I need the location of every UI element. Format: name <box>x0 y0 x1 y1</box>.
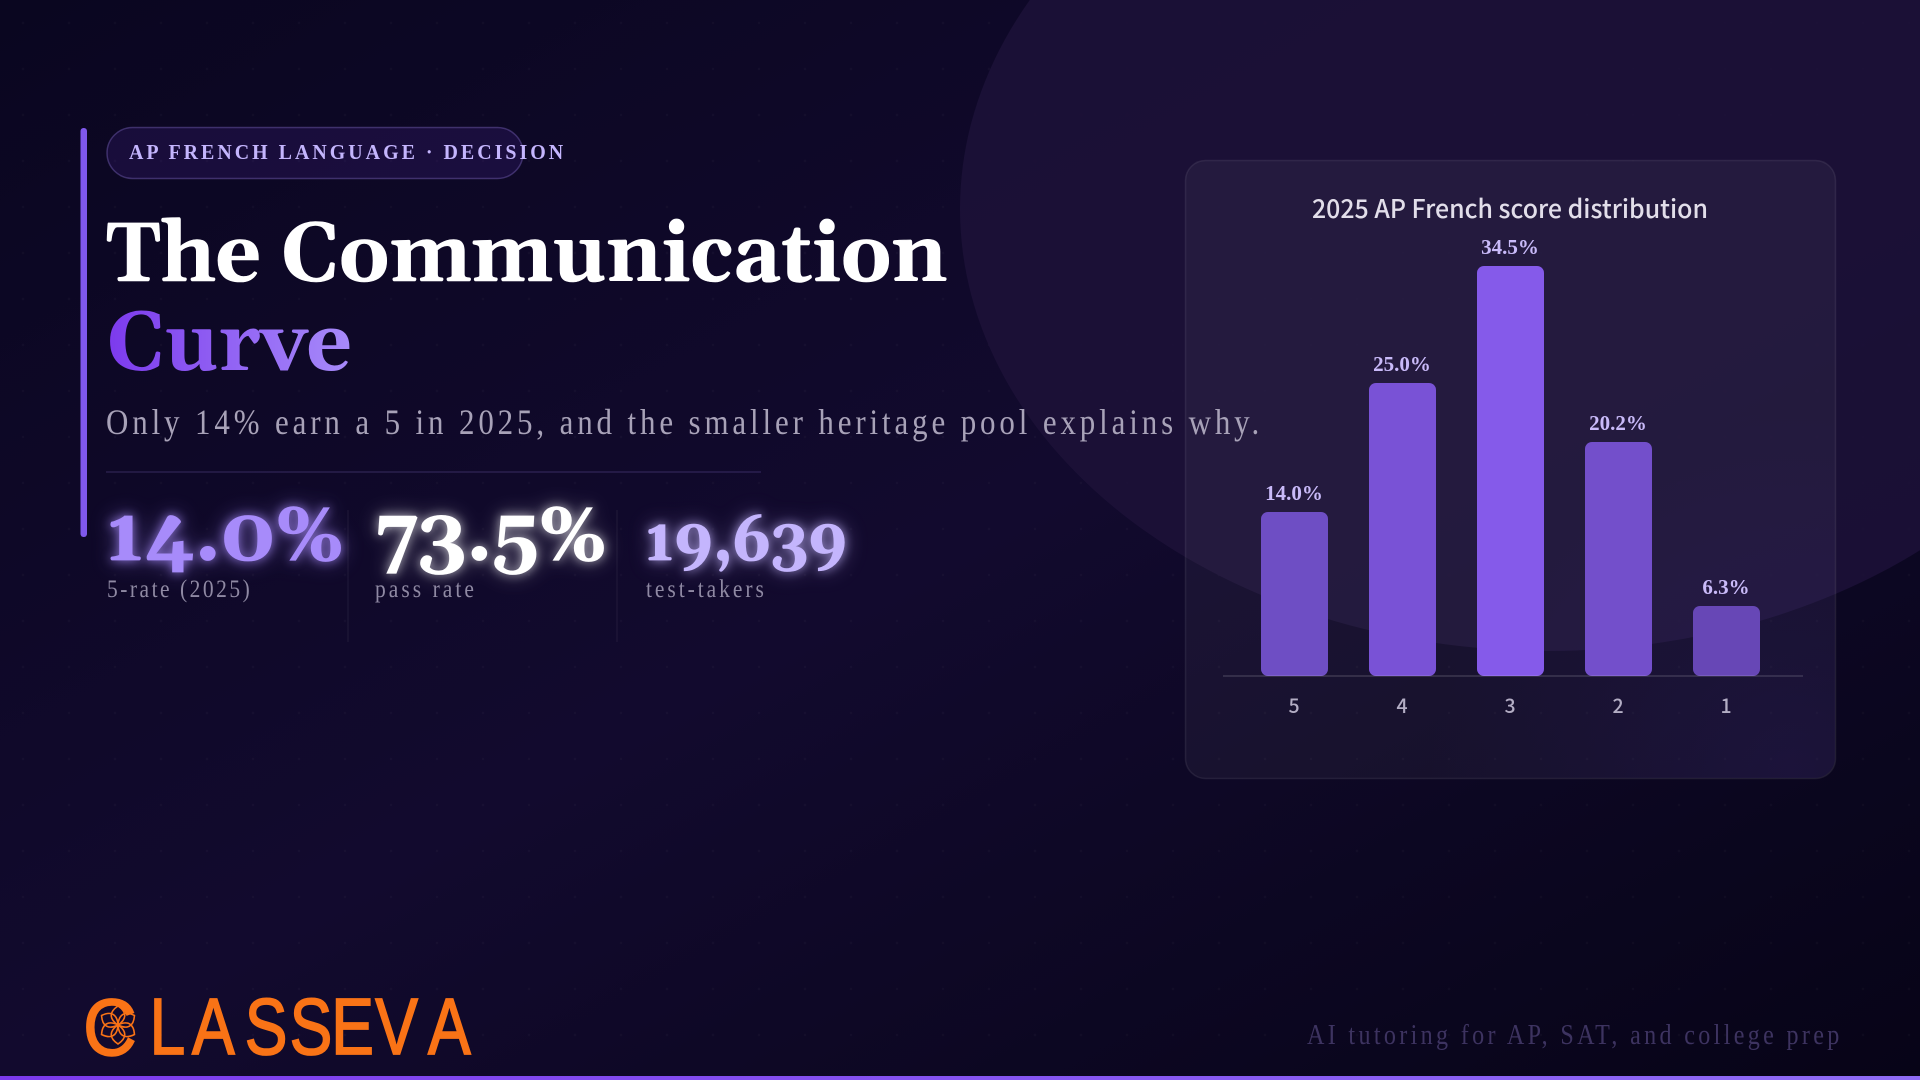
stat: test-takers: test-takers <box>646 576 764 603</box>
stat: 5-rate: 5-rate (2025) <box>107 576 250 603</box>
bar chart: 34.5% <box>1481 235 1539 259</box>
divider <box>106 471 761 473</box>
bar chart: 25.0% <box>1373 352 1431 376</box>
panel: score distribution chart <box>1186 160 1836 778</box>
stat: pass rate: pass rate <box>375 576 474 603</box>
subtitle: Only 14% earn a 5 in 2025, and the smaller heritage pool explains why. <box>106 403 1259 443</box>
bar chart: 6.3% <box>1702 575 1750 599</box>
bar chart: 20.2% <box>1589 411 1647 435</box>
title: The Communication <box>106 203 947 310</box>
bottom bar <box>0 1076 1920 1080</box>
bar chart: 1 <box>1720 690 1732 719</box>
title <box>106 203 947 399</box>
chart title: 2025 AP French score distribution <box>1312 189 1708 226</box>
bar chart: 14.0% <box>1265 481 1323 505</box>
bar chart: 3 <box>1504 690 1516 719</box>
bar chart: 2 <box>1612 690 1624 719</box>
stat: test-takers: 19,639 <box>645 504 847 581</box>
eyebrow pill <box>107 128 563 178</box>
eyebrow pill: AP FRENCH LANGUAGE · DECISION <box>129 142 563 164</box>
tagline: AI tutoring for AP, SAT, and college prep <box>1307 1019 1839 1050</box>
title: Curve <box>107 292 352 399</box>
bar chart <box>1223 235 1803 719</box>
icon: flower <box>98 1006 138 1044</box>
bar chart: 4 <box>1396 690 1408 719</box>
logo: CLASSEVA: LASSEVA <box>150 982 471 1072</box>
bar chart: 5 <box>1288 690 1300 719</box>
stat: pass rate: 73.5% <box>375 489 607 586</box>
accent bar <box>80 128 87 537</box>
logo: CLASSEVA: C <box>83 983 137 1073</box>
stat: 5-rate: 14.0% <box>106 489 344 586</box>
